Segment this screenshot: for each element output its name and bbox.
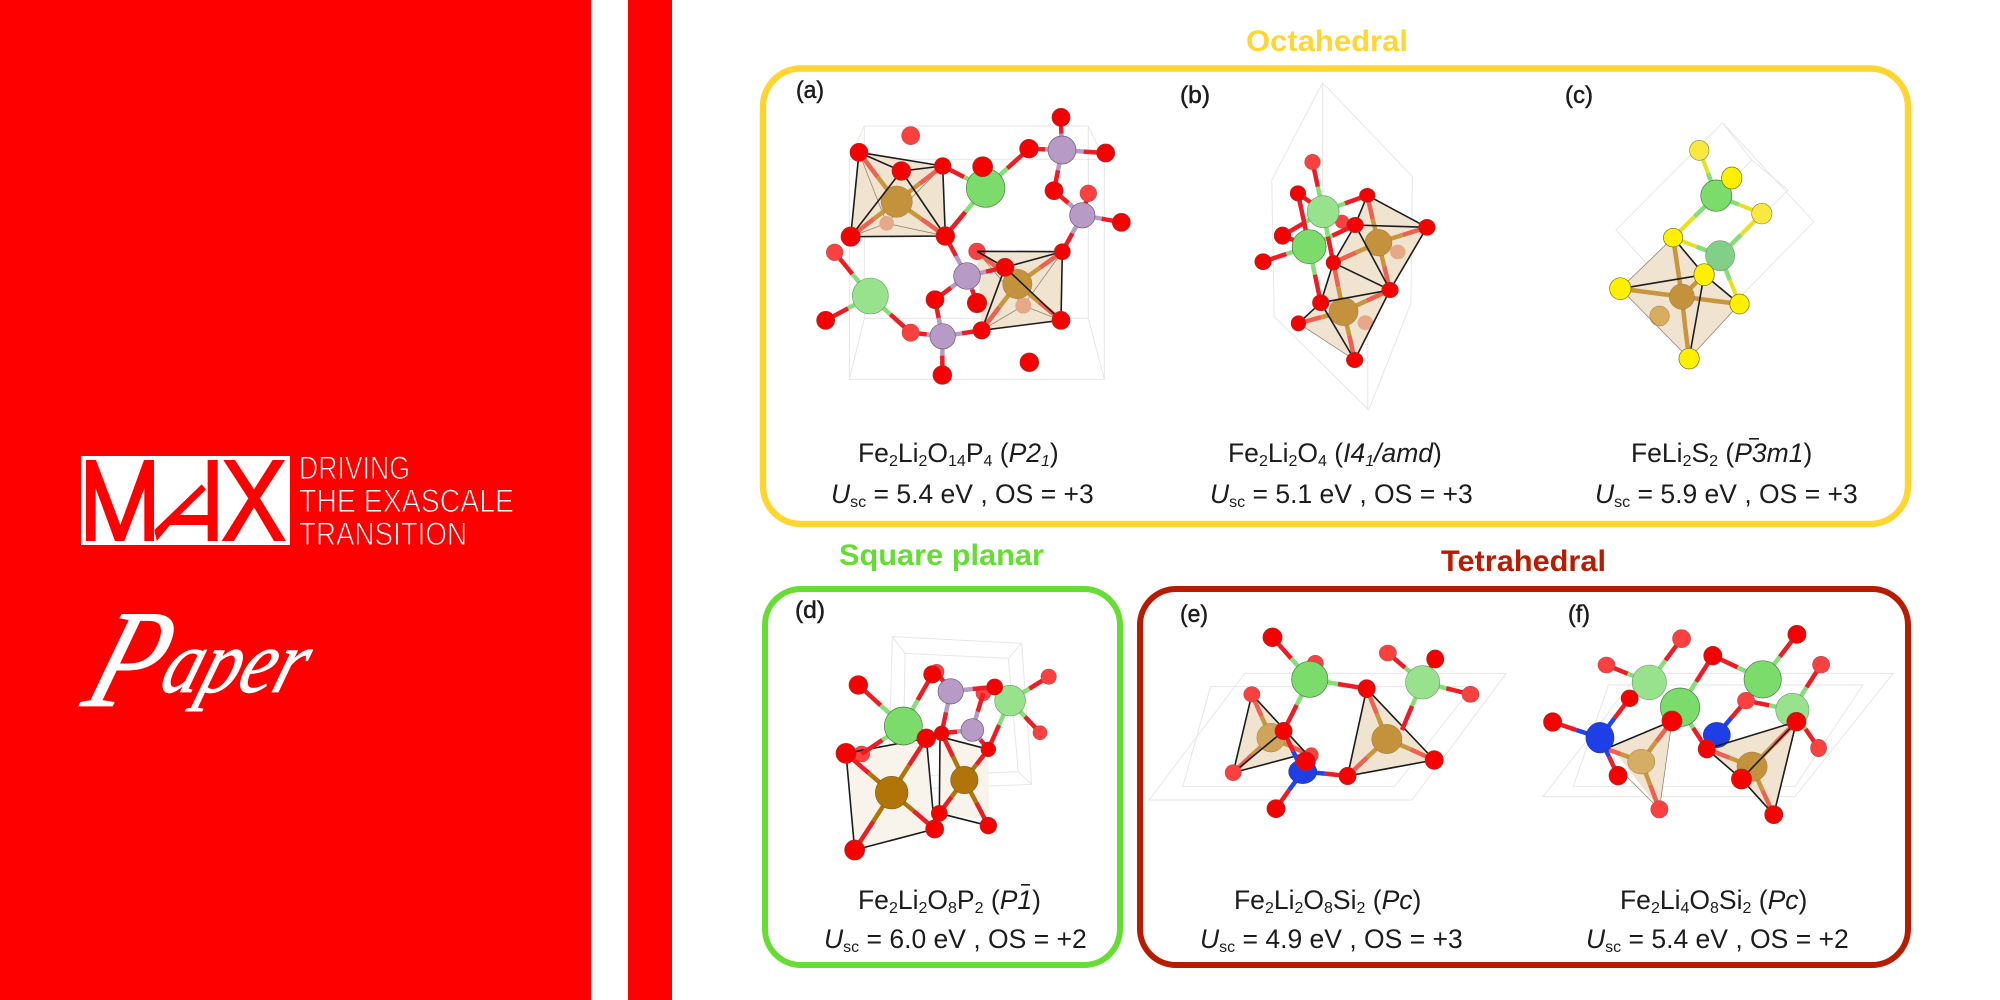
script word: Paper: aper: [151, 612, 326, 711]
panel labels: (d): [795, 597, 825, 624]
panel: square planar box: [765, 589, 1120, 965]
heading: Octahedral: Octahedral: [1246, 25, 1408, 58]
caption a: ): [1050, 438, 1059, 468]
caption a: P2: [1009, 438, 1041, 468]
panel labels: (c): [1565, 82, 1593, 109]
caption d: Li: [898, 885, 918, 915]
caption a: = 5.4 eV , OS = +3: [866, 479, 1094, 509]
caption e: 2: [1356, 900, 1366, 917]
caption b: [1210, 438, 1473, 511]
caption e: Fe: [1234, 885, 1265, 915]
caption f: sc: [1605, 939, 1621, 956]
caption e: = 4.9 eV , OS = +3: [1235, 924, 1463, 954]
caption e: (: [1365, 885, 1382, 915]
logo tagline: TRANSITION: [299, 516, 467, 552]
caption d: 2: [975, 900, 984, 917]
left red panel: [0, 0, 591, 1000]
structure f: Fe2Li4O8Si2: [1543, 625, 1893, 824]
caption e: O: [1303, 885, 1324, 915]
caption b: ): [1433, 438, 1442, 468]
caption c: P3m1): [1734, 438, 1812, 468]
caption d: (: [984, 885, 1000, 915]
logo mark: [81, 456, 290, 545]
caption e: sc: [1219, 939, 1235, 956]
caption f: (: [1751, 885, 1768, 915]
caption d: Fe: [858, 885, 889, 915]
caption f: 2: [1651, 900, 1660, 917]
structure a: Fe2Li2O14P4: [817, 108, 1130, 384]
caption e: [1200, 885, 1463, 956]
caption b: sc: [1229, 494, 1245, 511]
panel: octahedral box: [763, 68, 1908, 524]
caption e: 2: [1294, 900, 1303, 917]
caption a: sc: [850, 494, 866, 511]
caption e: Si: [1333, 885, 1356, 915]
caption a: U: [831, 479, 851, 509]
caption b: = 5.1 eV , OS = +3: [1245, 479, 1473, 509]
caption c: [1595, 438, 1858, 511]
logo tagline: THE EXASCALE: [299, 483, 514, 519]
caption f: Pc): [1768, 885, 1807, 915]
caption f: [1586, 885, 1849, 956]
caption b: Fe: [1228, 438, 1259, 468]
caption b: Li: [1268, 438, 1288, 468]
caption d: = 6.0 eV , OS = +2: [859, 924, 1087, 954]
caption d: 2: [889, 900, 898, 917]
caption a: [831, 438, 1094, 511]
caption e: Pc): [1382, 885, 1421, 915]
caption e: U: [1200, 924, 1220, 954]
caption d: O: [927, 885, 948, 915]
caption b: (: [1327, 438, 1343, 468]
panel: tetrahedral box: [1140, 589, 1908, 965]
caption e: Li: [1274, 885, 1294, 915]
caption c: sc: [1614, 494, 1630, 511]
panel labels: (b): [1180, 82, 1210, 109]
caption e: 8: [1324, 900, 1333, 917]
caption b: 2: [1288, 453, 1297, 470]
structure e: Fe2Li2O8Si2: [1149, 628, 1506, 818]
logo tagline: DRIVING: [299, 450, 410, 486]
caption c: 2: [1683, 453, 1692, 470]
caption c: 2: [1709, 453, 1718, 470]
panel labels: (e): [1180, 601, 1208, 628]
caption d: P1): [1000, 885, 1041, 915]
caption a: 2: [918, 453, 927, 470]
caption c: U: [1595, 479, 1615, 509]
caption f: Li: [1660, 885, 1680, 915]
caption c: FeLi: [1631, 438, 1683, 468]
caption f: 8: [1710, 900, 1719, 917]
caption f: U: [1586, 924, 1606, 954]
caption a: P: [966, 438, 984, 468]
caption a: 14: [948, 453, 966, 470]
caption a: Fe: [858, 438, 889, 468]
caption d: 2: [918, 900, 927, 917]
caption a: 2: [889, 453, 898, 470]
script word: Paper: P: [68, 582, 193, 737]
caption f: O: [1689, 885, 1710, 915]
caption b: O: [1297, 438, 1318, 468]
caption a: (: [992, 438, 1009, 468]
caption a: O: [927, 438, 948, 468]
caption d: [824, 884, 1087, 956]
caption f: = 5.4 eV , OS = +2: [1621, 924, 1849, 954]
caption b: /amd: [1372, 438, 1434, 468]
caption a: 1: [1041, 453, 1050, 470]
caption b: 4: [1318, 453, 1327, 470]
caption c: (: [1718, 438, 1734, 468]
caption a: Li: [898, 438, 918, 468]
panel labels: (f): [1568, 601, 1590, 628]
caption f: Si: [1719, 885, 1742, 915]
MaX logo: [81, 450, 514, 552]
caption d: 8: [948, 900, 957, 917]
panel labels: (a): [796, 77, 824, 104]
structure c: FeLi2S2: [1610, 123, 1814, 369]
red stripe: [628, 0, 672, 1000]
structure d: Fe2Li2O8P2: [836, 637, 1056, 860]
caption d: sc: [843, 939, 859, 956]
panel labels: [795, 77, 1593, 628]
caption a: 4: [984, 453, 992, 470]
caption f: Fe: [1620, 885, 1651, 915]
heading: Tetrahedral: Tetrahedral: [1441, 545, 1606, 578]
caption e: 2: [1265, 900, 1274, 917]
logo tagline: [299, 450, 514, 552]
caption f: 2: [1742, 900, 1752, 917]
caption d: P: [957, 885, 975, 915]
caption b: 2: [1259, 453, 1268, 470]
caption f: 4: [1680, 900, 1689, 917]
structure b: Fe2Li2O4: [1255, 83, 1435, 410]
caption b: 1: [1365, 453, 1374, 470]
caption d: U: [824, 924, 844, 954]
heading: Square planar: Square planar: [839, 539, 1044, 572]
caption c: = 5.9 eV , OS = +3: [1630, 479, 1858, 509]
caption b: U: [1210, 479, 1230, 509]
caption b: I4: [1343, 438, 1365, 468]
caption c: S: [1691, 438, 1709, 468]
